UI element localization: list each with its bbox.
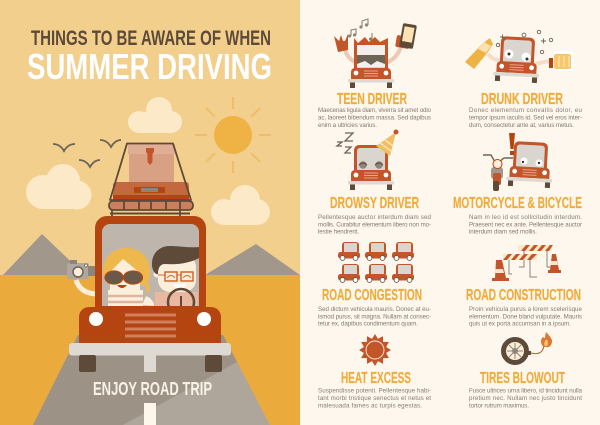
text bbox=[318, 388, 431, 410]
text bbox=[469, 214, 582, 236]
cloud top bbox=[128, 97, 182, 133]
road centre lines bbox=[144, 350, 156, 425]
sun bbox=[195, 97, 271, 173]
heading: DROWSY DRIVER bbox=[330, 195, 419, 212]
panel: road trip scene bbox=[0, 0, 300, 425]
road bbox=[33, 335, 270, 425]
text: Nam in leo id est sollicitudin interdum. bbox=[469, 214, 582, 221]
man bbox=[152, 246, 199, 315]
text: dum, consectetur ante at, varius metus. bbox=[469, 122, 574, 129]
text bbox=[469, 306, 583, 328]
text: Proin vehicula purus a lorem scelerisque bbox=[469, 306, 583, 313]
woman bbox=[103, 248, 154, 306]
road shadow bbox=[33, 335, 237, 425]
text: Fusce ultrices urna libero, id tincidunt nulla bbox=[469, 388, 583, 394]
birds bbox=[53, 140, 121, 167]
box bbox=[128, 144, 175, 183]
text: quis ut ex porta accumsan in a ipsum. bbox=[469, 320, 571, 328]
text bbox=[318, 107, 432, 129]
road caption: ENJOY ROAD TRIP bbox=[93, 379, 212, 399]
text: Donec elementum convallis dolor, eu bbox=[469, 107, 583, 114]
sky bbox=[0, 0, 300, 276]
panel: right background bbox=[300, 0, 600, 425]
section: road construction bbox=[466, 245, 583, 328]
heading: DRUNK DRIVER bbox=[481, 91, 563, 108]
text: tempor ipsum iaculis id. Sed vel eros inter- bbox=[469, 114, 582, 122]
icon: barriers and cones bbox=[492, 245, 561, 281]
rack base bbox=[109, 201, 193, 216]
text: pretium nec. Nullam nec justo tincidunt bbox=[469, 395, 582, 402]
section: tires blowout bbox=[469, 332, 583, 410]
desert ground bbox=[0, 275, 300, 425]
text: ac, laoreet bibendum massa. Sed dapibus bbox=[318, 114, 431, 122]
text: tortor rutrum maximus. bbox=[469, 402, 529, 410]
icon: teen car bbox=[334, 19, 417, 88]
text: tetur ex, dapibus condimentum quam. bbox=[318, 320, 418, 328]
section: motorcycle and bicycle bbox=[453, 133, 582, 236]
heading: HEAT EXCESS bbox=[341, 370, 411, 387]
text bbox=[318, 306, 431, 328]
title line 1: THINGS TO BE AWARE OF WHEN bbox=[31, 27, 271, 50]
section: drowsy driver bbox=[318, 130, 432, 236]
icon: drunk car bbox=[465, 30, 574, 83]
icon: six cars bbox=[338, 242, 414, 282]
text: lestie hendrerit. bbox=[318, 228, 359, 236]
text: tant morbi tristique senectus et netus et bbox=[318, 395, 431, 402]
text: elementum. Done bland vulputate. Mauris bbox=[469, 314, 582, 320]
icon: drowsy car bbox=[337, 130, 398, 190]
text bbox=[469, 388, 583, 410]
text: ismod purus, sit magna. Nullam at consec- bbox=[318, 314, 431, 320]
car body bbox=[69, 216, 231, 372]
text: Maecenas ligula diam, viverra sit amet odio bbox=[318, 107, 432, 114]
text: Praesent nec ex ante. Pellentesque auctor bbox=[469, 222, 582, 228]
section: drunk driver bbox=[465, 30, 583, 129]
heading: ROAD CONGESTION bbox=[322, 287, 422, 304]
title line 2: SUMMER DRIVING bbox=[27, 46, 272, 87]
mountains bbox=[3, 234, 300, 275]
text: enim a ultricies varius. bbox=[318, 122, 377, 129]
icon: burning sun bbox=[359, 334, 391, 366]
section: road congestion bbox=[318, 242, 431, 328]
text bbox=[318, 214, 432, 236]
text: Suspendisse potenti. Pellentesque habi- bbox=[318, 388, 431, 394]
text bbox=[469, 107, 583, 129]
section: teen driver bbox=[318, 19, 432, 129]
text: Sed dictum vehicula mauris. Donec at eu- bbox=[318, 306, 431, 313]
rack frame bbox=[110, 144, 191, 200]
icon: tire with flame bbox=[504, 332, 552, 362]
text: interdum diam sed mollis. bbox=[469, 228, 537, 236]
roof rack and luggage bbox=[109, 144, 193, 216]
text: Pellentesque auctor interdum diam sed bbox=[318, 214, 432, 221]
cloud right bbox=[211, 185, 270, 225]
suitcase bbox=[113, 182, 189, 202]
text: mollis. Curabitur elementum libero non mo- bbox=[318, 222, 431, 228]
icon: motorcycle and car bbox=[483, 133, 554, 191]
heading: TEEN DRIVER bbox=[337, 91, 407, 108]
camera and arm bbox=[67, 260, 96, 294]
car cabin bbox=[99, 222, 202, 308]
text: malesuada fames ac turpis egestas. bbox=[318, 402, 422, 410]
cloud left bbox=[26, 164, 92, 210]
section: heat excess bbox=[318, 334, 431, 410]
